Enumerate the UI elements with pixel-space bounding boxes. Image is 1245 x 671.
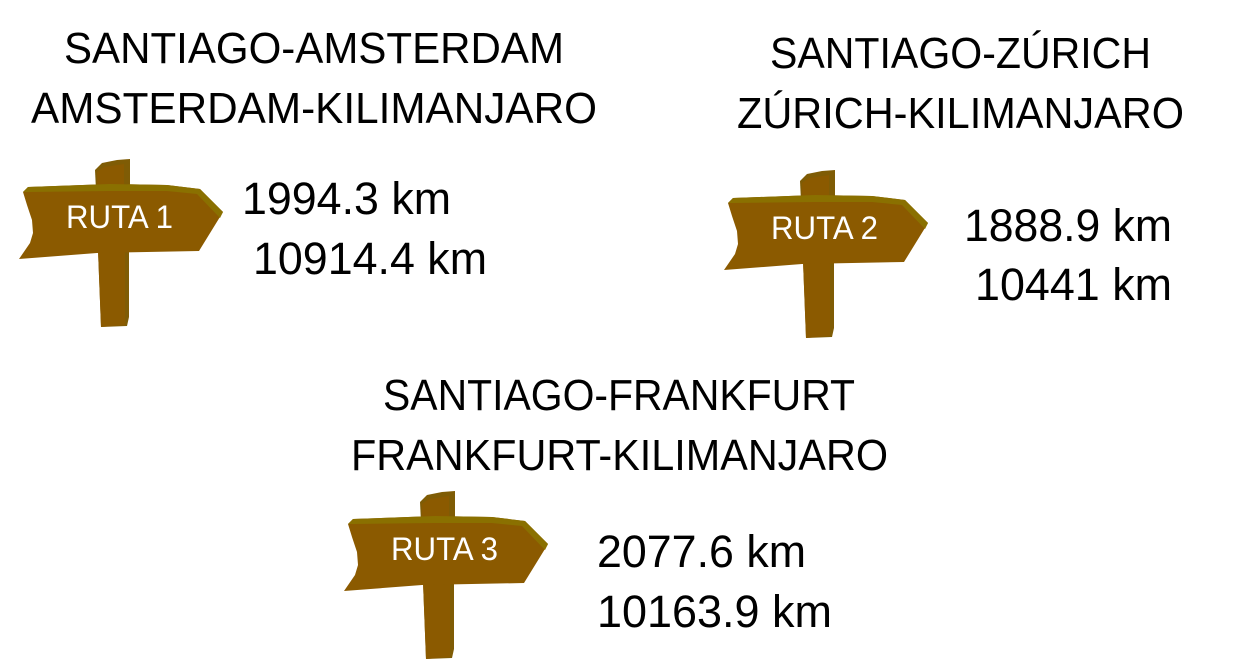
- heading: ruta 3: [351, 371, 888, 480]
- distances: ruta 1: [242, 173, 487, 284]
- icon: signpost ruta 3: RUTA 3: [391, 531, 498, 567]
- icon: signpost ruta 2: [724, 170, 928, 338]
- heading: ruta 2: [737, 29, 1184, 138]
- distances: ruta 2: 1888.9 km: [964, 200, 1172, 251]
- icon: signpost ruta 2: RUTA 2: [771, 210, 878, 246]
- icon: signpost ruta 1: RUTA 1: [66, 199, 173, 235]
- distances: ruta 3: 2077.6 km: [597, 526, 806, 577]
- heading: ruta 1: [31, 24, 597, 133]
- heading: ruta 1: AMSTERDAM-KILIMANJARO: [31, 84, 597, 133]
- distances: ruta 3: 10163.9 km: [597, 586, 832, 637]
- heading: ruta 2: SANTIAGO-ZÚRICH: [770, 29, 1151, 78]
- distances: ruta 3: [597, 526, 832, 637]
- panel: ruta 2: [724, 29, 1184, 338]
- icon: signpost ruta 3: [344, 491, 548, 659]
- heading: ruta 3: SANTIAGO-FRANKFURT: [383, 371, 855, 420]
- distances: ruta 1: 1994.3 km: [242, 173, 451, 224]
- distances: ruta 1: 10914.4 km: [253, 233, 487, 284]
- heading: ruta 1: SANTIAGO-AMSTERDAM: [64, 24, 564, 73]
- panel: ruta 3: [344, 371, 888, 659]
- panel: ruta 1: [19, 24, 597, 327]
- heading: ruta 3: FRANKFURT-KILIMANJARO: [351, 431, 888, 480]
- distances: ruta 2: 10441 km: [975, 259, 1172, 310]
- heading: ruta 2: ZÚRICH-KILIMANJARO: [737, 89, 1184, 138]
- distances: ruta 2: [964, 200, 1172, 310]
- icon: signpost ruta 1: [19, 159, 223, 327]
